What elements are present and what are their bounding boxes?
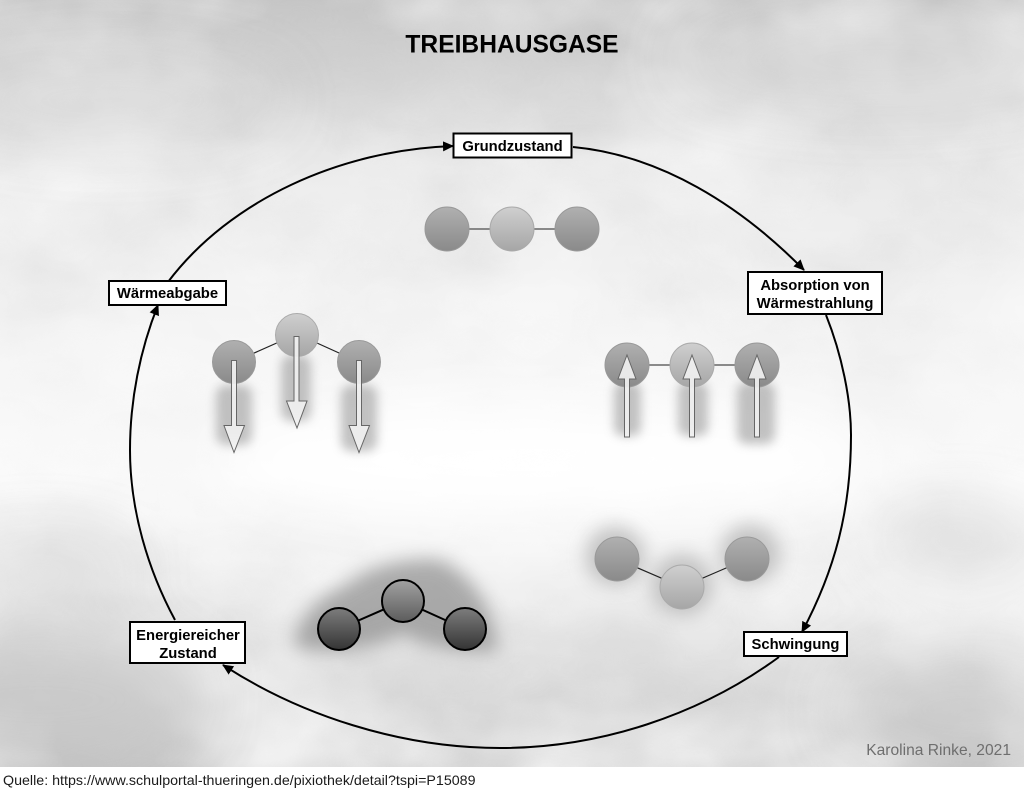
arrow: Wärmeabgabe to Grundzustand <box>168 146 453 282</box>
label: Grundzustand <box>454 134 572 158</box>
label: Wärmeabgabe: Wärmeabgabe <box>117 286 218 302</box>
label: Energiereicher Zustand <box>130 622 245 663</box>
label: Absorption von Wärmestrahlung: Wärmestrahlung <box>757 296 873 312</box>
arrow: Energiereicher Zustand to Wärmeabgabe <box>130 305 175 620</box>
label: Schwingung: Schwingung <box>752 637 839 653</box>
title: TREIBHAUSGASE <box>405 32 619 58</box>
label: Grundzustand: Grundzustand <box>462 139 563 155</box>
molecule: absorption with up arrows <box>605 343 779 444</box>
arrow: Absorption to Schwingung <box>802 315 851 632</box>
label: Schwingung <box>744 632 847 656</box>
cycle arrows <box>130 146 851 748</box>
label: Absorption von Wärmestrahlung <box>748 272 882 314</box>
label: Energiereicher Zustand: Zustand <box>159 646 217 662</box>
molecule: vibration <box>585 524 780 616</box>
up arrows <box>618 355 766 437</box>
label: Absorption von Wärmestrahlung: Absorption von <box>760 278 870 294</box>
arrow: Schwingung to Energiereicher Zustand <box>223 657 779 748</box>
arrow: Grundzustand to Absorption <box>573 147 804 270</box>
label: Wärmeabgabe <box>109 281 226 305</box>
molecule: ground state <box>425 207 599 251</box>
source line: Quelle: https://www.schulportal-thueringen.de/pixiothek/detail?tspi=P15089 <box>3 773 476 789</box>
credit: Karolina Rinke, 2021 <box>866 742 1011 759</box>
down arrows <box>224 336 370 452</box>
molecule: energetic state <box>296 560 498 652</box>
molecule: heat release with down arrows <box>212 314 380 452</box>
label: Energiereicher Zustand: Energiereicher <box>136 628 240 644</box>
